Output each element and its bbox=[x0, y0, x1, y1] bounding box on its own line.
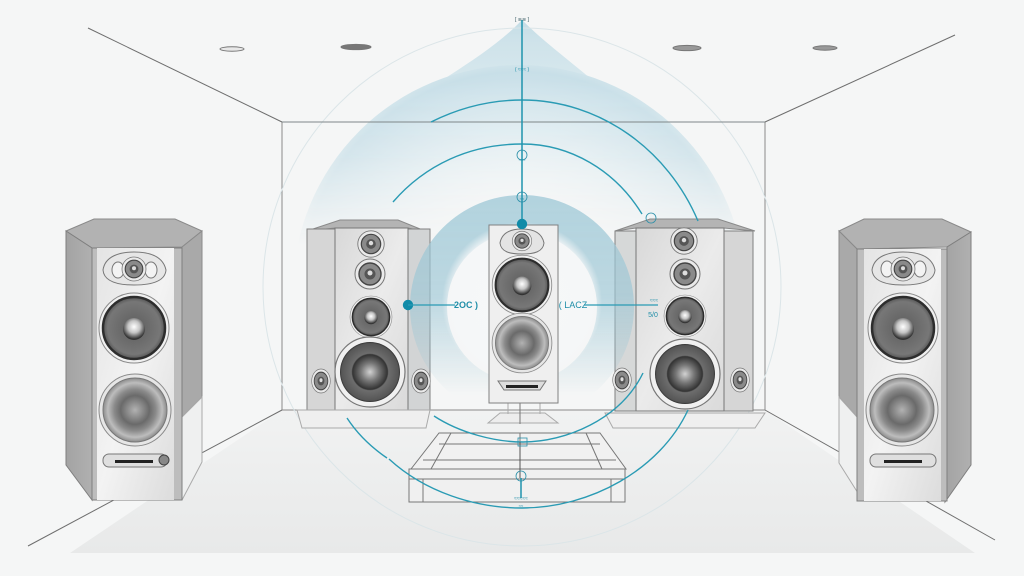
woofer bbox=[866, 374, 938, 446]
cabinet bbox=[839, 219, 971, 249]
top cone bbox=[447, 20, 590, 78]
horizontal callout lines bbox=[408, 304, 658, 306]
drivers bbox=[671, 228, 697, 254]
small labels: ≈≈ bbox=[520, 196, 525, 201]
base bbox=[605, 413, 765, 428]
small labels: ( LACZ bbox=[559, 300, 588, 310]
centre platform bbox=[409, 403, 626, 502]
tweeter bbox=[872, 252, 935, 285]
small labels: ≈≈≈ bbox=[650, 298, 658, 304]
small labels: ( ≈≈≈ ) bbox=[515, 67, 530, 73]
marker dots bbox=[403, 219, 527, 310]
small labels: 2OC ) bbox=[454, 300, 478, 310]
base bbox=[297, 410, 430, 428]
port bbox=[870, 454, 936, 467]
cabinet bbox=[615, 219, 755, 231]
centre axis line bbox=[520, 20, 522, 498]
woofer bbox=[99, 374, 171, 446]
small labels: 5/0 bbox=[648, 312, 658, 319]
right speaker bbox=[839, 219, 971, 502]
midrange driver bbox=[868, 293, 938, 363]
axis markers bbox=[516, 150, 656, 481]
faint outer circle bbox=[263, 28, 781, 546]
ceiling lights bbox=[220, 44, 837, 51]
tweeter bbox=[103, 252, 166, 285]
small labels: ≈≈ bbox=[519, 503, 524, 508]
woofer bbox=[492, 313, 552, 373]
left front speaker bbox=[297, 220, 430, 428]
small labels: ≈≈≈≈≈ bbox=[514, 496, 528, 502]
back wall line over waves bbox=[282, 121, 765, 123]
sound wave fields bbox=[263, 20, 781, 546]
small labels: [ ≋≋ ] bbox=[515, 17, 530, 23]
cabinet bbox=[307, 220, 430, 233]
large wave band bbox=[306, 68, 732, 224]
tweeter bbox=[500, 229, 544, 254]
midrange driver bbox=[99, 293, 169, 363]
inner clear zone bbox=[442, 222, 602, 382]
small labels bbox=[454, 17, 658, 508]
centre speaker bbox=[489, 225, 558, 403]
small labels: ≈≈≈ bbox=[519, 157, 526, 162]
right front speaker bbox=[605, 219, 765, 428]
floor bbox=[70, 410, 975, 553]
inner wave ring bbox=[410, 195, 634, 382]
teal wave arcs bbox=[347, 100, 698, 508]
midrange driver bbox=[492, 255, 552, 315]
port bbox=[498, 381, 546, 390]
cabinet bbox=[66, 219, 202, 248]
drivers bbox=[358, 231, 384, 257]
port bbox=[103, 454, 169, 467]
left speaker bbox=[66, 219, 202, 500]
